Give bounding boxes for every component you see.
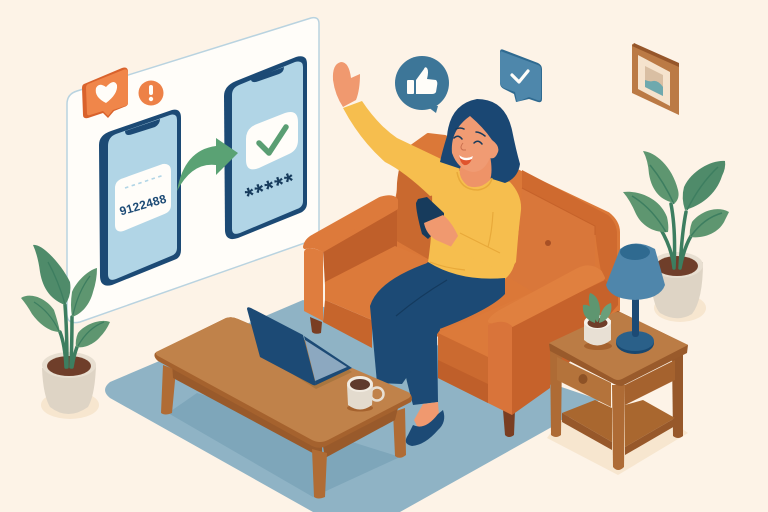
wall picture frame (632, 43, 679, 115)
face (452, 116, 498, 172)
phone: code entry (99, 110, 181, 286)
sweater collar (457, 172, 492, 190)
rug (105, 300, 600, 512)
front leg (612, 385, 625, 470)
laptop (247, 307, 352, 389)
sofa legs (310, 317, 515, 437)
woman waving (333, 62, 521, 446)
table legs back (161, 365, 406, 458)
plant: left floor (21, 245, 110, 419)
icon: check bubble (500, 49, 542, 102)
side table (547, 244, 688, 475)
arm: raised sleeve (343, 101, 460, 196)
code card: 9122488 (118, 192, 168, 218)
icon: thumbs up bubble (395, 56, 449, 113)
apron and drawer (557, 357, 675, 407)
icon: heart notification (82, 68, 128, 118)
foot and shoe (406, 402, 444, 446)
table top (549, 311, 688, 386)
check card (246, 112, 298, 169)
back leg (370, 262, 440, 384)
table top (154, 317, 412, 448)
floor shadow (547, 420, 688, 475)
panel: phone verification screen (67, 18, 319, 323)
phone: code confirmed (224, 56, 307, 239)
seat cushions (323, 246, 533, 403)
sofa back (395, 135, 618, 400)
apron (172, 362, 400, 458)
coffee mug (347, 376, 384, 412)
hair (440, 99, 520, 183)
front leg (312, 449, 327, 498)
neck (460, 155, 492, 187)
arrow between phones (177, 138, 238, 191)
masked password: ***** (242, 167, 300, 209)
torso (428, 170, 521, 282)
coffee table (154, 307, 412, 498)
icon: alert badge (138, 80, 164, 106)
arm: forearm sleeve (430, 212, 520, 270)
plant: large right (623, 151, 729, 322)
right arm (488, 267, 618, 415)
phone in hand (416, 197, 444, 239)
hand: raised (333, 62, 360, 107)
lower shelf (562, 400, 675, 455)
table lamp (606, 244, 665, 354)
code card (117, 166, 169, 230)
small plant (583, 293, 612, 350)
sofa (304, 135, 618, 437)
left arm (304, 197, 397, 321)
holding hand (424, 215, 459, 247)
front leg (396, 262, 505, 405)
table legs (550, 350, 683, 438)
